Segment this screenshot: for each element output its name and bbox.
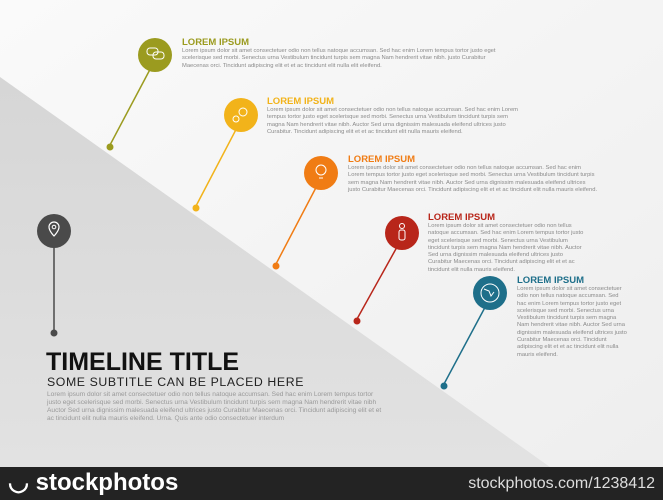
text block 2: Lorem ipsum dolor sit amet consectetuer odio non tellus natoque accumsan. Sed hac enim Lorem tempus tortor justo eget scelerisque sed morbi. Senectus urna Vestibulum tincidunt turpis sem magna Nam hendrerit vitae nibh. Auctor Sed urna dignissim malesuada eleifend ultrices justo Curabitur. Tincidunt adipiscing elit et et ac tincidunt elit nulla mauris eleifend. (267, 107, 518, 135)
text block 1: Lorem ipsum dolor sit amet consectetuer odio non tellus natoque accumsan. Sed hac enim Lorem tempus tortor justo eget scelerisque sed morbi. Senectus urna Vestibulum tincidunt turpis sem magna Nam hendrerit vitae nibh. justo Curabitur Maecenas orci. Tincidunt adipiscing elit et et ac tincidunt elit nulla elit eleifend. (182, 48, 496, 69)
text block 1: LOREM IPSUM (182, 37, 249, 48)
title: TIMELINE TITLE (46, 348, 239, 376)
text block 3: LOREM IPSUM (348, 154, 415, 165)
text block 5: Lorem ipsum dolor sit amet consectetuer odio non tellus natoque accumsan. Sed hac enim Lorem tempus tortor justo eget scelerisque sed morbi. Senectus urna Vestibulum tincidunt turpis sem magna Nam hendrerit vitae nibh. Auctor Sed urna dignissim malesuada eleifend ultrices justo Curabitur Maecenas orci. Tincidunt adipiscing elit et et ac tincidunt elit nulla mauris eleifend. (517, 286, 627, 358)
footer logo: ◡ stockphotos (8, 469, 178, 496)
pin 1: olive (106, 38, 172, 150)
text block 3: Lorem ipsum dolor sit amet consectetuer odio non tellus natoque accumsan. Sed hac enim Lorem tempus tortor justo eget scelerisque sed morbi. Senectus urna Vestibulum tincidunt turpis sem magna Nam hendrerit vitae nibh. Auctor Sed urna dignissim malesuada eleifend ultrices justo Curabitur Maecenas orci. Tincidunt adipiscing elit et et ac tincidunt elit nulla mauris eleifend. (348, 165, 597, 193)
paragraph: Lorem ipsum dolor sit amet consectetuer odio non tellus natoque accumsan. Sed hac enim Lorem tempus tortor justo eget scelerisque sed morbi. Senectus urna Vestibulum tincidunt turpis sem magna Nam hendrerit vitae nibh Auctor Sed urna dignissim malesuada eleifend ultrices justo Curabitur Maecenas orci. Tincidunt adipiscing elit et et ac tincidunt elit nulla mauris eleifend. Urna. Quis ante odio consectetuer interdum (47, 391, 381, 422)
text block 5: LOREM IPSUM (517, 275, 584, 286)
subtitle: SOME SUBTITLE CAN BE PLACED HERE (47, 375, 304, 389)
text block 1 (182, 37, 496, 69)
footer bar (0, 467, 663, 500)
pin 5: teal (440, 276, 507, 390)
footer url: stockphotos.com/1238412 (468, 475, 655, 492)
text block 2: LOREM IPSUM (267, 96, 334, 107)
pin 3: orange (272, 156, 338, 270)
pin: grey (37, 214, 71, 336)
text block 4: Lorem ipsum dolor sit amet consectetuer odio non tellus natoque accumsan. Sed hac enim Lorem tempus tortor justo eget scelerisque sed morbi. Senectus urna Vestibulum tincidunt turpis sem magna Nam hendrerit vitae nibh. Auctor Sed urna dignissim malesuada eleifend ultrices justo Curabitur Maecenas orci. Tincidunt adipiscing elit et et ac tincidunt elit nulla mauris eleifend. (428, 223, 583, 273)
pin 4: red (354, 216, 419, 324)
text block 4: LOREM IPSUM (428, 212, 495, 223)
pin 2: yellow (192, 98, 258, 212)
